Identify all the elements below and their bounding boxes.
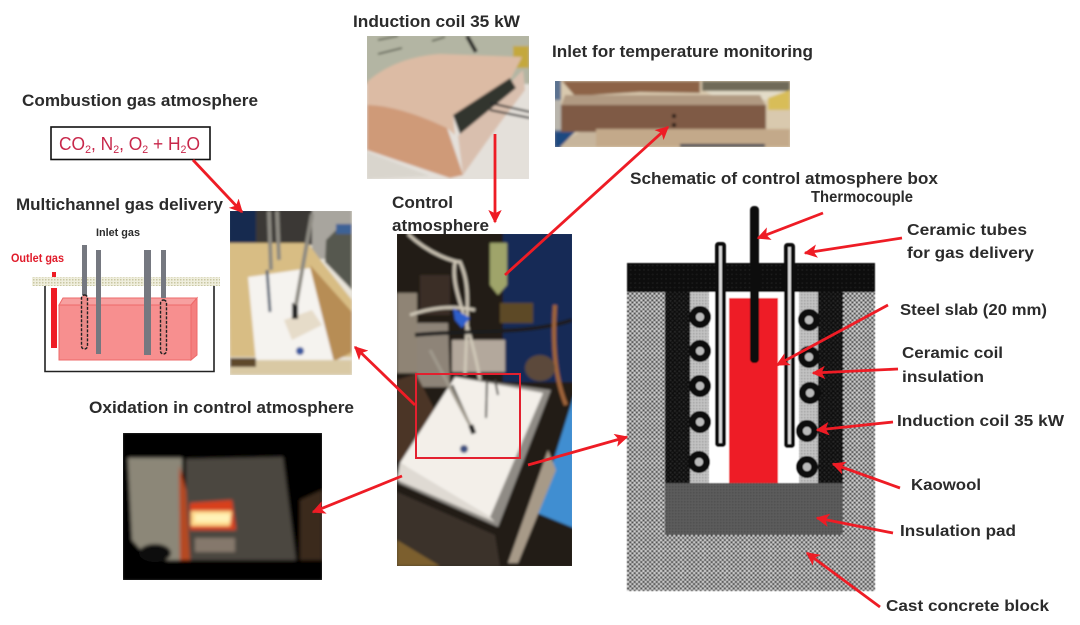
cast concrete block	[627, 292, 875, 591]
label: control atmosphere	[392, 193, 489, 235]
callout: gas composition box: 2	[85, 144, 91, 156]
label: kaowool: Kaowool	[911, 477, 981, 494]
label: outlet gas: Outlet gas	[11, 251, 64, 265]
interior	[709, 292, 799, 483]
callout: gas composition box: , N	[91, 134, 113, 154]
label: ceramic tubes	[907, 222, 1034, 262]
arrows	[193, 127, 902, 607]
photo: temperature inlet	[553, 79, 792, 149]
photo: oxidation	[121, 431, 324, 582]
callout: gas composition box: 2	[181, 144, 186, 156]
heading: temperature inlet: Inlet for temperature monitoring	[552, 42, 813, 61]
lid	[627, 263, 875, 292]
insulation pad	[665, 483, 843, 535]
heading: combustion gas atmosphere: Combustion gas atmosphere	[22, 91, 258, 110]
callout: gas composition box: 2	[142, 144, 148, 156]
label: ceramic coil insulation: insulation	[902, 369, 984, 386]
arrow: steel slab	[777, 305, 888, 365]
label: control atmosphere: atmosphere	[392, 216, 489, 235]
callout: gas composition box: CO	[59, 134, 86, 154]
arrow: cast concrete block	[807, 553, 880, 607]
label: cast concrete block: Cast concrete block	[886, 598, 1049, 615]
steel slab	[59, 298, 197, 360]
label: inlet gas: Inlet gas	[96, 227, 140, 239]
thermocouple	[750, 206, 759, 363]
callout: gas composition box: O	[186, 134, 200, 154]
outlet tube	[51, 272, 57, 348]
gas tubes	[82, 245, 166, 355]
photo: control atmosphere setup	[395, 232, 574, 568]
callout: gas composition box	[51, 127, 210, 160]
arrow: ceramic tubes	[805, 238, 902, 253]
ceramic coil insulation	[690, 292, 818, 483]
arrow: setup to schematic	[528, 437, 627, 465]
arrow: kaowool	[833, 464, 900, 488]
induction coils	[691, 309, 818, 475]
lid	[32, 277, 220, 286]
photo: gas delivery setup	[228, 209, 354, 377]
label: ceramic tubes: Ceramic tubes	[907, 222, 1027, 239]
callout: gas composition box: + H	[148, 134, 181, 154]
ceramic tubes	[717, 244, 793, 446]
label: induction coil: Induction coil 35 kW	[897, 413, 1065, 430]
arrow: gas box to photo	[193, 160, 242, 212]
arrow: ceramic coil insulation	[813, 369, 898, 373]
diagram: multichannel gas delivery	[11, 227, 220, 372]
label: ceramic coil insulation	[902, 345, 1003, 386]
highlight rectangle	[416, 374, 520, 458]
arrow: induction coil	[817, 422, 893, 430]
arrow: setup to oxidation	[313, 476, 402, 512]
heading: oxidation in control atmosphere: Oxidation in control atmosphere	[89, 398, 354, 417]
arrow: highlight to gas delivery photo	[355, 347, 415, 405]
arrow: coil to setup	[494, 134, 496, 222]
label: ceramic tubes: for gas delivery	[907, 245, 1034, 262]
diagram: schematic of control atmosphere box	[627, 206, 875, 591]
label: ceramic coil insulation: Ceramic coil	[902, 345, 1003, 362]
steel slab	[729, 298, 778, 483]
callout: gas composition box: 2	[113, 144, 119, 156]
callout: gas composition box: , O	[119, 134, 142, 154]
label: control atmosphere: Control	[392, 193, 453, 212]
heading: multichannel gas delivery: Multichannel gas delivery	[16, 195, 224, 214]
kaowool	[665, 292, 843, 483]
label: thermocouple: Thermocouple	[811, 189, 913, 206]
heading: schematic: Schematic of control atmosphere box	[630, 169, 939, 188]
arrow: setup to temperature inlet	[505, 127, 668, 275]
label: steel slab: Steel slab (20 mm)	[900, 302, 1047, 319]
dashed tube ends	[82, 295, 166, 354]
arrow: insulation pad	[817, 518, 893, 533]
box walls	[45, 286, 214, 372]
photo: induction coil	[365, 34, 531, 181]
arrow: thermocouple	[758, 213, 823, 238]
label: insulation pad: Insulation pad	[900, 523, 1016, 540]
heading: induction coil: Induction coil 35 kW	[353, 12, 521, 31]
